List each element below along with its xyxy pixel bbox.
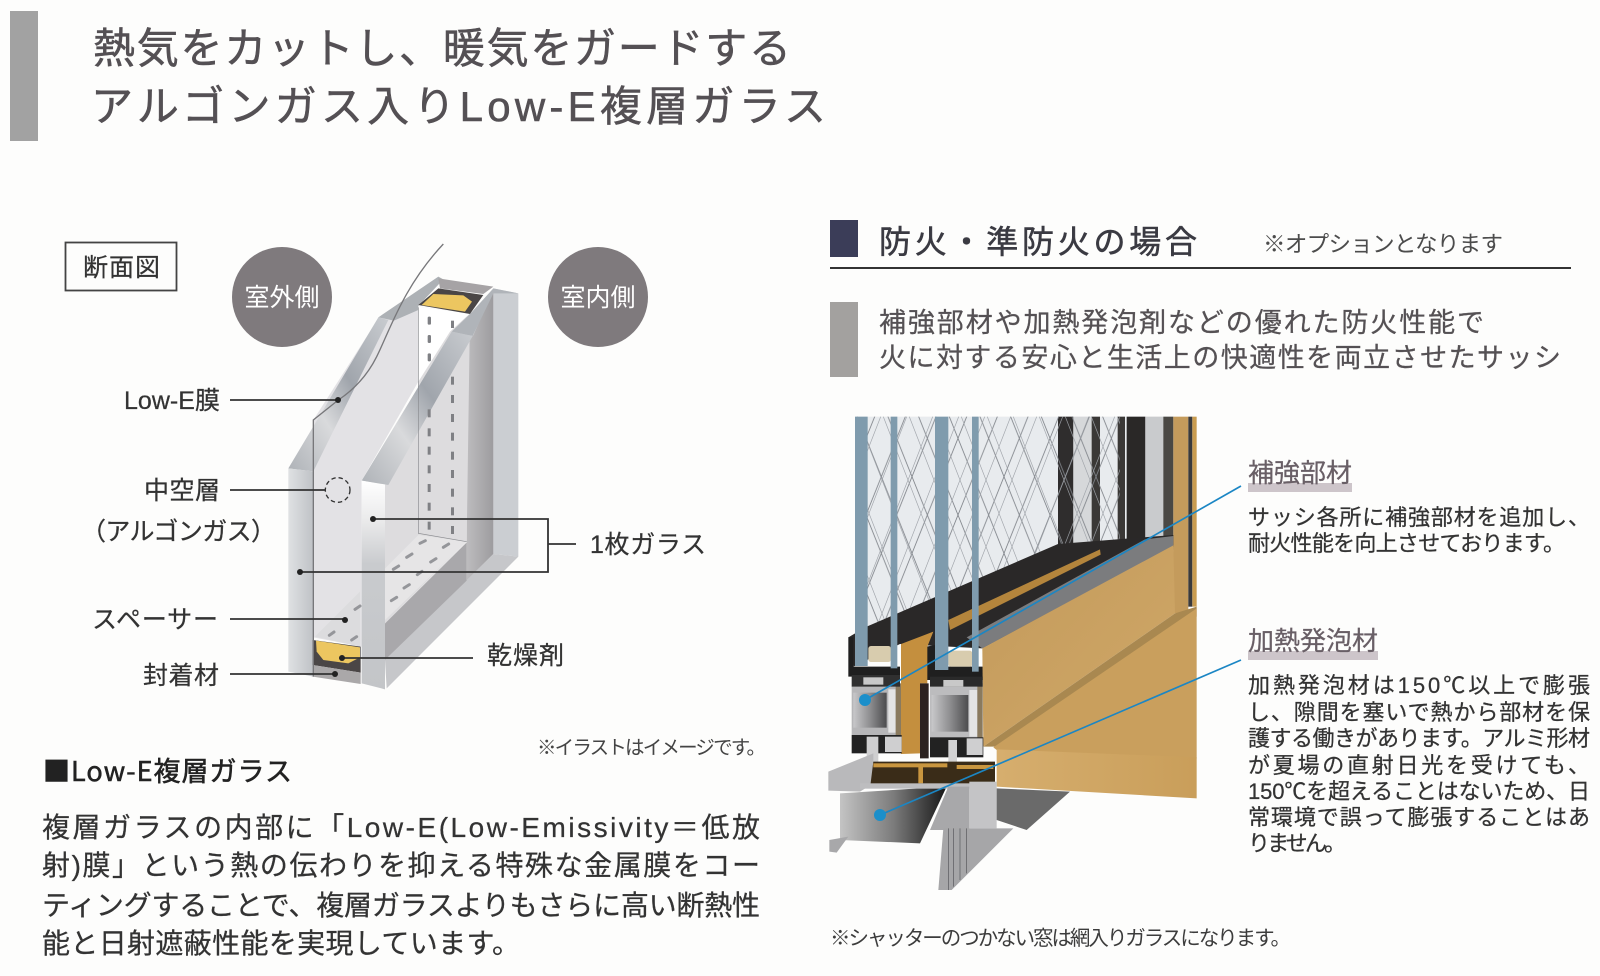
callout body: 護する働きがあります。アルミ形材	[1248, 726, 1590, 751]
part labels: 封着材	[143, 662, 219, 690]
badge: indoor side: 室内側	[560, 284, 636, 312]
glass edges	[855, 417, 979, 672]
title	[91, 25, 826, 130]
leader dots	[297, 397, 376, 677]
part labels: （アルゴンガス）	[81, 518, 276, 546]
callout body: 耐火性能を向上させております。	[1248, 531, 1565, 556]
panel: cross-section diagram	[66, 242, 706, 690]
part labels: Low-E膜	[124, 387, 220, 415]
footnote: ※シャッターのつかない窓は網入りガラスになります。	[830, 927, 1291, 950]
callout body: サッシ各所に補強部材を追加し、	[1248, 505, 1590, 530]
callout body: し、隙間を塞いで熱から部材を保	[1248, 700, 1590, 725]
part labels: 乾燥剤	[487, 642, 564, 670]
heading marker: fire protection	[830, 220, 858, 257]
note: illustration is an image: ※イラストはイメージです。	[537, 737, 766, 759]
callout heading highlight	[1248, 483, 1352, 492]
callout heading: 補強部材	[1248, 458, 1352, 488]
sash profiles	[852, 646, 983, 780]
callout heading: 加熱発泡材	[1248, 626, 1378, 656]
text block: Low-E description: 複層ガラスの内部に「Low-E(Low-Emissivity＝低放	[42, 812, 760, 843]
note: optional: ※オプションとなります	[1263, 232, 1503, 257]
callout line: reinforcement	[859, 486, 1241, 706]
badge: indoor side	[548, 247, 648, 347]
heading: fire protection: 防火・準防火の場合	[879, 224, 1197, 260]
title: アルゴンガス入りLow-E複層ガラス	[91, 83, 826, 130]
leader lines	[230, 400, 576, 674]
title accent bar	[10, 11, 38, 141]
illustration: double glazing cutaway	[288, 244, 518, 689]
callout heading highlight	[1248, 651, 1378, 660]
part labels: 1枚ガラス	[590, 531, 706, 559]
text block: Low-E description: 射)膜」という熱の伝わりを抑える特殊な金属膜をコー	[42, 850, 760, 881]
callout line: foaming material	[874, 660, 1241, 821]
Low-E film line	[313, 244, 443, 677]
dashed circle: gas layer	[325, 478, 350, 502]
part labels: 中空層	[144, 477, 220, 505]
text block: Low-E description: ティングすることで、複層ガラスよりもさらに高い断熱性	[42, 890, 760, 921]
heading: Low-E glass: ■Low-E複層ガラス	[43, 750, 292, 789]
illustration: fire-rated window sash section	[828, 417, 1241, 890]
wired glass	[855, 417, 1173, 630]
label box: 断面図	[66, 242, 176, 290]
label box: 断面図: 断面図	[83, 254, 160, 282]
text block: Low-E description: 能と日射遮蔽性能を実現しています。	[42, 928, 520, 959]
callout body: りません。	[1248, 831, 1346, 856]
callout body	[1248, 673, 1590, 856]
heading rule	[830, 267, 1571, 269]
subheading text: 補強部材や加熱発泡剤などの優れた防火性能で	[879, 308, 1484, 338]
text block: Low-E description	[42, 812, 760, 959]
callout body: 常環境で誤って膨張することはあ	[1248, 805, 1590, 830]
title: 熱気をカットし、暖気をガードする	[93, 25, 791, 72]
callout body: が夏場の直射日光を受けても、	[1248, 753, 1590, 778]
wood panels	[901, 545, 1175, 758]
callout body: 加熱発泡材は150℃以上で膨張	[1248, 673, 1590, 698]
part labels	[81, 387, 706, 690]
subheading accent bar	[830, 302, 858, 377]
badge: outdoor side: 室外側	[244, 284, 320, 312]
sill	[983, 607, 1197, 798]
callout body: 150℃を超えることはないため、日	[1248, 779, 1590, 804]
subheading text: 火に対する安心と生活上の快適性を両立させたサッシ	[879, 343, 1561, 373]
callout: foaming material	[1248, 626, 1590, 856]
badge: outdoor side	[232, 247, 332, 347]
jamb	[1173, 417, 1197, 613]
lower frame	[828, 753, 1070, 890]
callout: reinforcement	[1248, 458, 1590, 556]
callout body	[1248, 505, 1590, 556]
part labels: スペーサー	[92, 606, 218, 634]
lower sash rails	[848, 535, 1173, 680]
subheading text	[879, 308, 1561, 373]
